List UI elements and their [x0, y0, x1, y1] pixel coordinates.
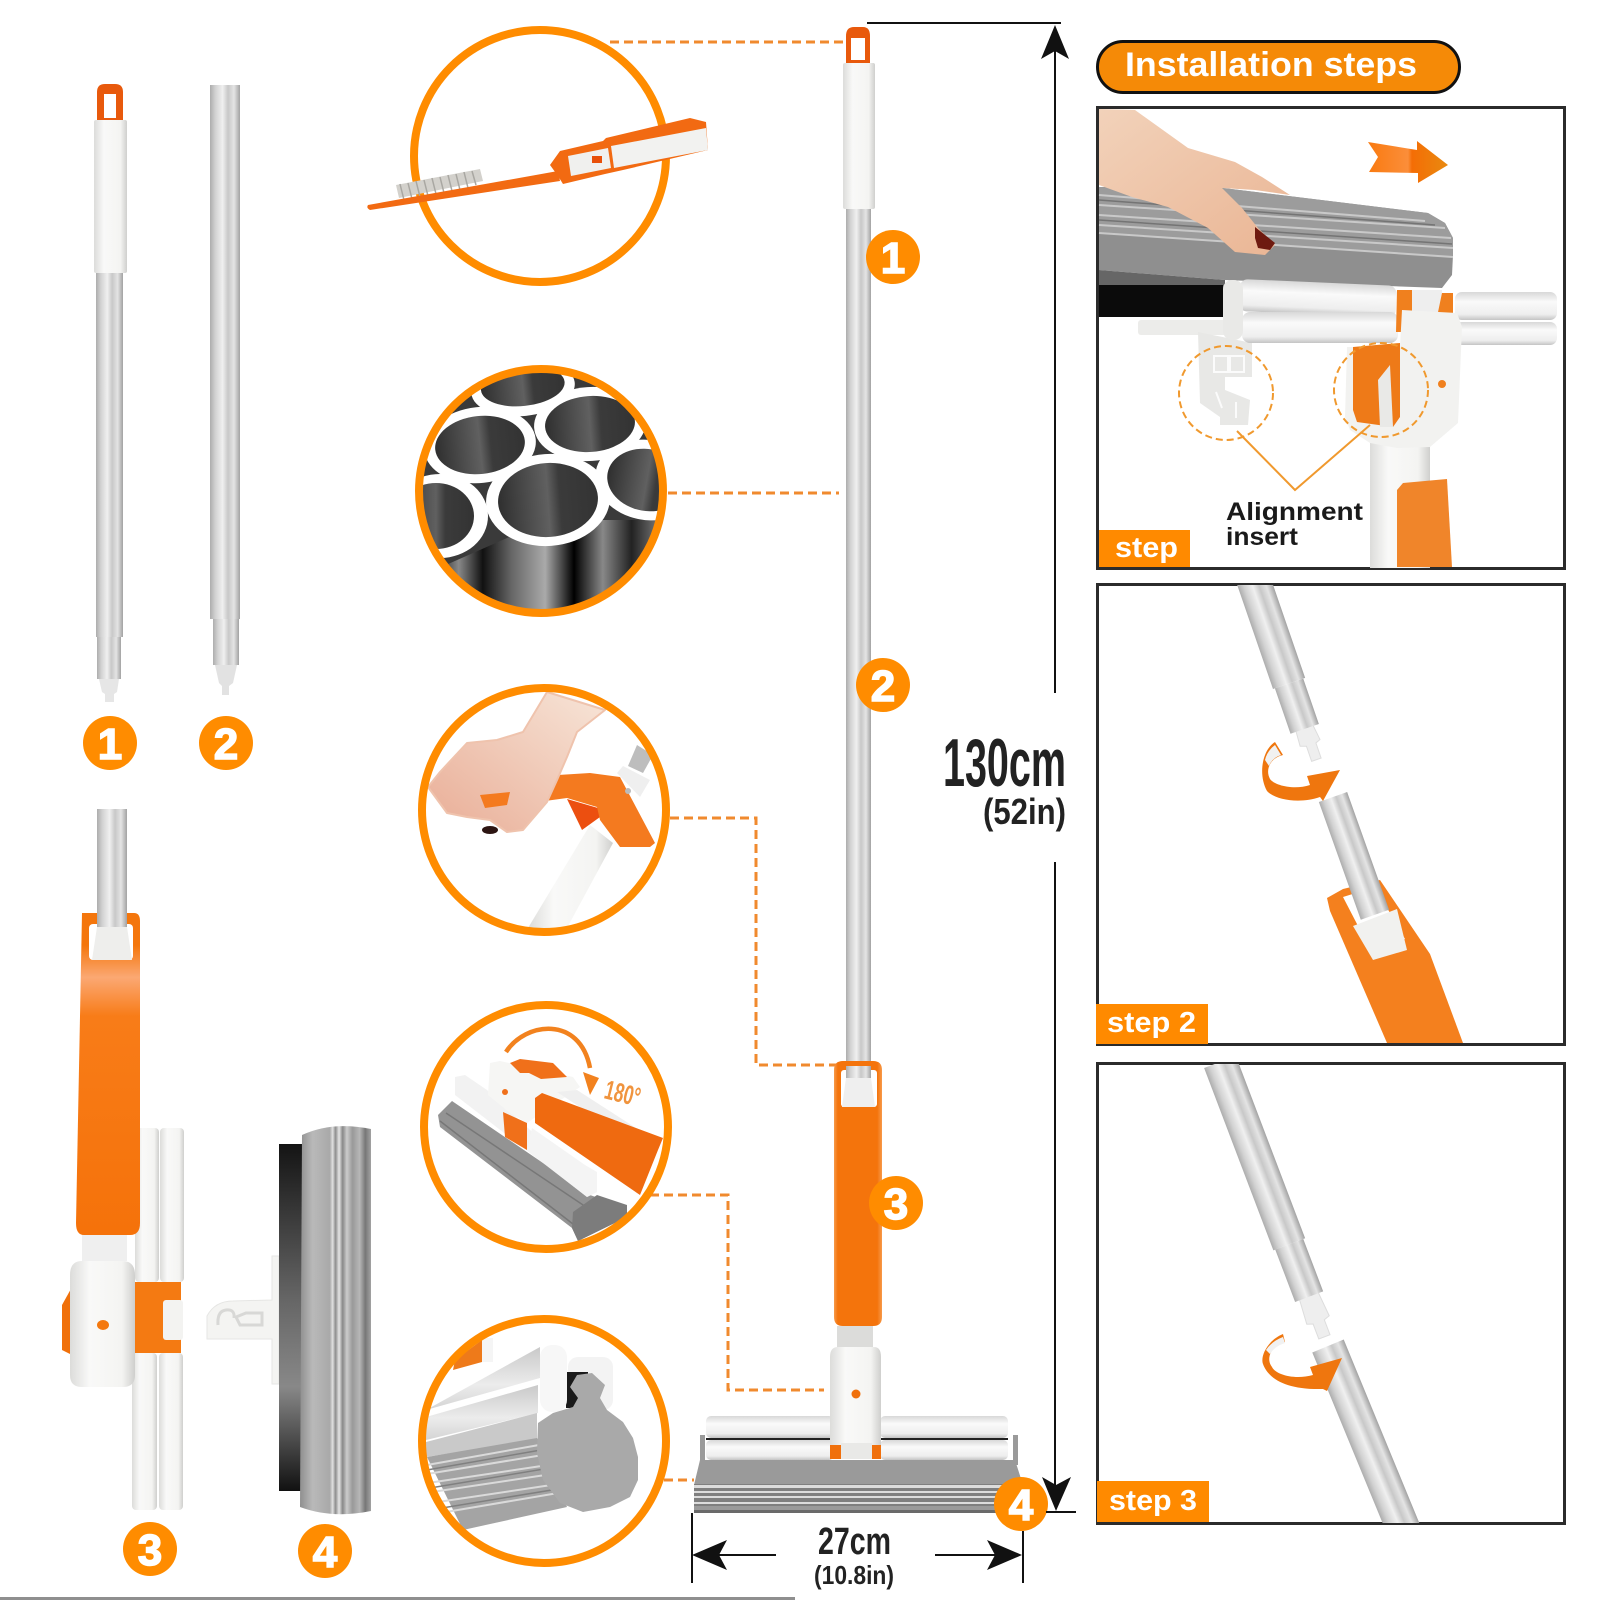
step label	[1099, 530, 1190, 567]
height dimension	[867, 23, 1076, 1512]
collar	[1353, 909, 1407, 960]
connector lines	[610, 42, 845, 1480]
number badge 3 on mop: 3	[884, 1180, 908, 1229]
orange handle	[1327, 880, 1463, 1043]
step 2 label: step 2	[1107, 1007, 1196, 1039]
lower pole	[1312, 1340, 1420, 1537]
upper pole	[1237, 585, 1322, 762]
sponge being slid on	[1099, 187, 1453, 317]
part 2: lower pole	[210, 85, 240, 695]
detail circle: 180 degree rotation	[424, 1005, 668, 1249]
number badge 2	[199, 716, 253, 770]
panel: step 2	[1096, 564, 1564, 1044]
bracket and handle	[1345, 310, 1462, 570]
number badge 1 on mop: 1	[881, 234, 905, 283]
upper pole	[1204, 1064, 1330, 1340]
alignment text: insert	[1226, 523, 1299, 551]
number badge 4	[298, 1524, 352, 1578]
part 3: handle and roller head	[62, 809, 184, 1510]
number badge 2 on mop	[856, 658, 910, 712]
alignment callout circles	[1179, 343, 1428, 490]
detail circle: 180 degree rotation: 180°	[602, 1075, 644, 1113]
number badge 3: 3	[138, 1526, 162, 1575]
step 3 label	[1097, 1481, 1209, 1522]
heading: Installation steps: Installation steps	[1125, 46, 1417, 84]
lower pole	[1319, 792, 1389, 920]
panel: step 1	[1098, 108, 1564, 570]
number badge 3	[123, 1522, 177, 1576]
hand on sponge	[1099, 109, 1290, 255]
number badge 1 on mop	[866, 230, 920, 284]
number badge 4: 4	[313, 1528, 338, 1577]
part 1: upper pole with head	[94, 84, 127, 702]
number badge 4 on mop	[994, 1477, 1048, 1531]
number badge 2: 2	[214, 720, 238, 769]
icon: direction arrow	[1368, 141, 1448, 183]
detail circle: aluminium tube cross-section	[415, 365, 667, 617]
height dimension: 130cm	[943, 725, 1066, 801]
width dimension	[692, 1513, 1023, 1590]
icon: twist arrow	[1262, 742, 1340, 801]
height dimension: (52in)	[983, 791, 1066, 832]
rollers and hook	[1138, 279, 1557, 425]
number badge 4 on mop: 4	[1009, 1481, 1034, 1530]
number badge 1: 1	[98, 720, 122, 769]
number badge 3 on mop	[869, 1176, 923, 1230]
width dimension: (10.8in)	[814, 1560, 894, 1590]
detail circle: head brush tool	[367, 30, 708, 282]
step 2 label	[1096, 1004, 1208, 1044]
icon: twist arrow	[1262, 1334, 1342, 1391]
painted nail	[1255, 227, 1275, 250]
number badge 1	[83, 716, 137, 770]
assembled mop	[694, 27, 1023, 1513]
alignment text: Alignment	[1226, 498, 1364, 526]
rollers	[706, 1416, 1008, 1460]
step label: step	[1115, 532, 1178, 564]
heading: Installation steps	[1098, 42, 1460, 92]
panel: step 3	[1097, 1056, 1564, 1537]
number badge 2 on mop: 2	[871, 662, 895, 711]
alignment text	[1226, 498, 1364, 551]
sponge base	[694, 1435, 1023, 1513]
detail circle: sponge end profile	[422, 1319, 666, 1563]
width dimension: 27cm	[818, 1521, 891, 1563]
detail circle: hand pressing handle	[422, 688, 666, 932]
part 4: sponge head with hook	[207, 1126, 371, 1514]
step 3 label: step 3	[1109, 1485, 1197, 1517]
